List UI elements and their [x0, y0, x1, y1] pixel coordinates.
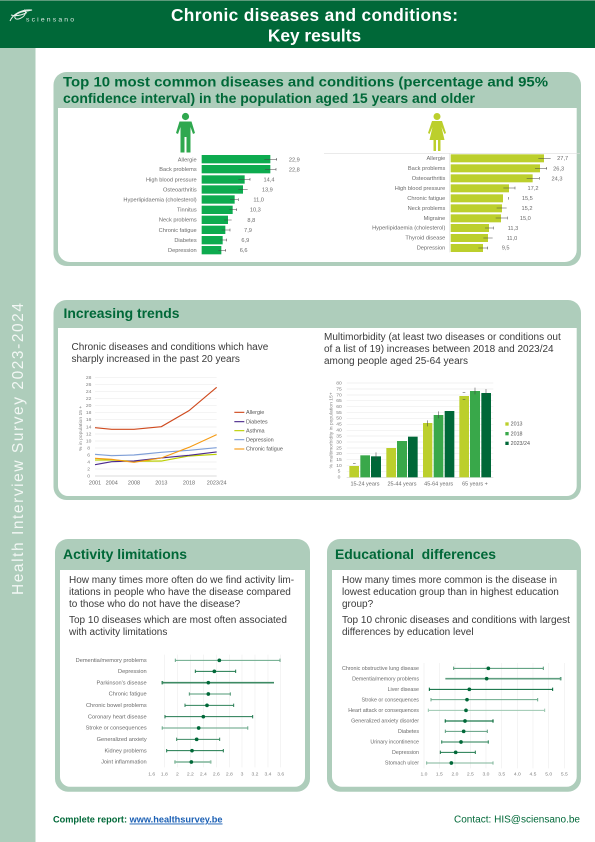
panel heading: Activity limitations — [63, 546, 187, 562]
line chart: 16 — [86, 417, 92, 423]
panel heading — [63, 74, 548, 106]
bar chart: women: Thyroid disease — [405, 236, 445, 242]
legend: 2023/24 — [511, 441, 530, 447]
text: question: How many times more often do we find activity lim- — [69, 575, 294, 586]
line chart: 2008 — [128, 481, 140, 487]
bar chart: multimorbidity: 30 — [336, 439, 342, 445]
bar chart: women: Neck problems — [408, 206, 445, 212]
legend — [505, 422, 530, 447]
line chart: 2013 — [155, 481, 167, 487]
line chart: 8 — [87, 445, 90, 451]
line chart: 12 — [86, 431, 92, 437]
forest plot: educational differences: Chronic obstructive lung disease — [342, 666, 419, 672]
line chart: % in population 15 + — [78, 406, 84, 451]
forest plot: educational differences: Liver disease — [388, 687, 419, 693]
text: multimorbidity caption — [324, 332, 561, 367]
bar chart: women: 15,0 — [520, 216, 531, 222]
forest plot: educational differences: 3.0 — [483, 771, 490, 777]
line chart: 2001 — [89, 481, 101, 487]
forest plot: educational differences: Stroke or consequences — [362, 697, 419, 703]
bar chart: women: High blood pressure — [395, 186, 445, 192]
text: line chart caption — [72, 342, 269, 365]
bar chart: men: Allergie — [178, 157, 197, 163]
forest plot: educational differences: 4.0 — [514, 771, 521, 777]
forest plot: educational differences: Depression — [392, 750, 419, 756]
bar chart: multimorbidity: 45-64 years — [424, 482, 453, 488]
icon: woman — [428, 113, 446, 151]
forest plot: educational differences: 5.5 — [561, 771, 568, 777]
text: question — [68, 575, 294, 638]
bar chart: women: 11,3 — [508, 226, 518, 232]
bar chart: men: 22,8 — [289, 167, 300, 173]
header band — [0, 0, 595, 48]
forest plot: activity limitations: 2.2 — [187, 771, 194, 777]
text: question: itations in people who have the disease compared — [69, 587, 291, 598]
footer: contact: Contact: HIS@sciensano.be — [454, 814, 580, 826]
forest plot: educational differences: 2.5 — [467, 771, 474, 777]
bar chart: multimorbidity: 65 years + — [462, 482, 488, 488]
bar chart: women: 9,5 — [502, 246, 510, 252]
bar chart: men: 8,8 — [247, 218, 255, 224]
bar chart: multimorbidity: 75 — [336, 386, 342, 392]
bar chart: women: 15,2 — [521, 206, 533, 212]
panel: increasing trends — [54, 300, 581, 500]
line chart: 4 — [87, 459, 90, 465]
bar chart: men: Neck problems — [159, 218, 197, 224]
bar chart: men: 13,9 — [262, 188, 273, 194]
line chart: 10 — [86, 438, 92, 444]
bar chart: women: 27,7 — [557, 156, 568, 162]
bar chart: multimorbidity: 10 — [336, 463, 342, 469]
bar chart: women: 11,0 — [507, 236, 517, 242]
text: multimorbidity caption: among people aged 25-64 years — [324, 356, 468, 367]
bar chart: men: 11,0 — [253, 198, 264, 204]
forest plot: educational differences: 4.5 — [530, 771, 537, 777]
bar chart: women: Depression — [417, 246, 445, 252]
legend: Allergie — [246, 410, 264, 416]
sidebar title: Health Interview Survey 2023-2024 — [10, 303, 27, 595]
panel: top 10 diseases — [54, 72, 581, 266]
panel heading: confidence interval) in the population aged 15 years and older — [63, 91, 476, 106]
forest plot: activity limitations: Generalized anxiety — [97, 737, 147, 743]
line chart: 24 — [86, 389, 92, 395]
bar chart: men: 7,9 — [244, 228, 252, 234]
legend — [234, 410, 283, 453]
sidebar — [0, 48, 36, 842]
forest plot: activity limitations: Chronic fatigue — [109, 692, 147, 698]
panel heading: Top 10 most common diseases and conditions (percentage and 95% — [63, 74, 548, 90]
bar chart: multimorbidity: 35 — [336, 433, 342, 439]
text: line chart caption: sharply increased in the past 20 years — [72, 354, 240, 365]
title — [171, 5, 458, 46]
bar chart: multimorbidity: 20 — [336, 451, 342, 457]
bar chart: men: 10,3 — [250, 208, 261, 214]
title: Key results — [268, 26, 361, 46]
forest plot: educational differences: 1.0 — [421, 771, 428, 777]
bar chart: men: Tinnitus — [177, 208, 197, 214]
legend: Depression — [246, 437, 274, 443]
text: multimorbidity caption: Multimorbidity (at least two diseases or conditions out — [324, 332, 561, 343]
forest plot: activity limitations: Depression — [118, 669, 147, 675]
bar chart: men: Hyperlipidaemia (cholesterol) — [123, 198, 197, 204]
logo: sciensano — [26, 16, 74, 24]
line chart: 2 — [87, 466, 90, 472]
forest plot: activity limitations: 2.4 — [200, 771, 207, 777]
line chart: 28 — [86, 375, 92, 381]
forest plot: educational differences: Diabetes — [398, 729, 419, 735]
forest plot: educational differences: Generalized anxiety disorder — [351, 719, 419, 725]
forest plot: activity limitations: 2 — [176, 771, 179, 777]
legend: Diabetes — [246, 419, 268, 425]
bar chart: men: 22,9 — [289, 157, 300, 163]
logo — [10, 10, 74, 24]
line chart: 0 — [87, 473, 90, 479]
line chart: 18 — [86, 410, 92, 416]
line chart: 2023/24 — [207, 481, 227, 487]
panel: activity limitations — [55, 539, 310, 792]
forest plot: activity limitations — [76, 655, 284, 777]
bar chart: women — [324, 153, 580, 252]
line chart: 2018 — [183, 481, 195, 487]
forest plot: educational differences: 3.5 — [498, 771, 505, 777]
text: question: to those who do not have the disease? — [69, 599, 241, 610]
text: multimorbidity caption: of a list of 19) increases between 2018 and 2023/24 — [324, 344, 554, 355]
line chart: 14 — [86, 424, 92, 430]
bar chart: women: Back problems — [408, 166, 445, 172]
forest plot: educational differences: 1.5 — [436, 771, 443, 777]
bar chart: multimorbidity: 15-24 years — [351, 482, 380, 488]
bar chart: men — [123, 155, 300, 254]
bar chart: women: 17,2 — [527, 186, 539, 192]
bar chart: multimorbidity — [328, 380, 530, 488]
forest plot: educational differences: Stomach ulcer — [385, 761, 419, 767]
bar chart: multimorbidity: 60 — [336, 404, 342, 410]
forest plot: activity limitations: Joint inflammation — [101, 760, 147, 766]
bar chart: multimorbidity: 55 — [336, 410, 342, 416]
forest plot: educational differences: Dementia/memory problems — [352, 676, 419, 682]
forest plot: activity limitations: 2.6 — [213, 771, 220, 777]
bar chart: men: Depression — [168, 248, 197, 254]
forest plot: activity limitations: Parkinson's disease — [97, 680, 147, 686]
bar chart: multimorbidity: 40 — [336, 428, 342, 434]
line chart: 6 — [87, 452, 90, 458]
text: question: How many times more common is the disease in — [342, 575, 557, 586]
bar chart: men: 6,9 — [241, 238, 249, 244]
bar chart: women: Allergie — [426, 156, 445, 162]
line chart: 26 — [86, 382, 92, 388]
forest plot: activity limitations: 3.2 — [252, 771, 259, 777]
bar chart: multimorbidity: 80 — [336, 380, 342, 386]
line chart: 20 — [86, 403, 92, 409]
bar chart: multimorbidity: 0 — [338, 475, 341, 481]
text: question: lowest education group than in highest education — [342, 587, 559, 598]
icon: man — [176, 113, 195, 152]
line chart: 2004 — [106, 481, 118, 487]
bar chart: women: Migraine — [424, 216, 445, 222]
legend: Asthma — [246, 428, 266, 434]
forest plot: activity limitations: Chronic bowel problems — [86, 703, 147, 709]
text: question: Top 10 chronic diseases and conditions with largest — [342, 615, 570, 626]
title: Chronic diseases and conditions: — [171, 5, 458, 25]
bar chart: multimorbidity: 65 — [336, 398, 342, 404]
forest plot: activity limitations: 1.8 — [161, 771, 168, 777]
panel heading: Educational differences — [335, 546, 496, 562]
forest plot: activity limitations: Stroke or consequences — [86, 726, 147, 732]
bar chart: multimorbidity: % multimorbidity in population 15+ — [328, 392, 334, 468]
forest plot: activity limitations: 2.8 — [226, 771, 233, 777]
forest plot: activity limitations: 3.4 — [265, 771, 272, 777]
line chart — [78, 375, 283, 487]
forest plot: activity limitations: 3 — [241, 771, 244, 777]
line chart: 22 — [86, 396, 92, 402]
forest plot: educational differences: 2.0 — [452, 771, 459, 777]
forest plot: activity limitations: Coronary heart disease — [88, 714, 147, 720]
panel: educational differences — [327, 539, 581, 792]
text: question — [342, 575, 570, 638]
bar chart: multimorbidity: 15 — [336, 457, 342, 463]
bar chart: women: Osteoarthritis — [412, 176, 445, 182]
text: question: group? — [342, 599, 374, 610]
bar chart: multimorbidity: 50 — [336, 416, 342, 422]
bar chart: men: Osteoarthritis — [163, 187, 197, 193]
forest plot: educational differences: Urinary incontinence — [370, 740, 419, 746]
bar chart: women: 15,5 — [522, 196, 533, 202]
bar chart: women: 26,3 — [553, 166, 564, 172]
legend: 2018 — [511, 431, 523, 437]
bar chart: women: Hyperlipidaemia (cholesterol) — [372, 226, 445, 232]
footer: complete report: Complete report: www.healthsurvey.be — [53, 814, 223, 824]
bar chart: men: Diabetes — [174, 238, 197, 244]
forest plot: activity limitations: Dementia/memory problems — [76, 658, 147, 664]
bar chart: men: Chronic fatigue — [159, 228, 197, 234]
text: question: differences by education level — [342, 627, 474, 638]
bar chart: multimorbidity: 70 — [336, 392, 342, 398]
bar chart: men: 14,4 — [263, 177, 275, 183]
panel heading: Increasing trends — [64, 305, 180, 321]
text: line chart caption: Chronic diseases and conditions which have — [72, 342, 269, 353]
forest plot: activity limitations: 3.6 — [277, 771, 284, 777]
bar chart: women: Chronic fatigue — [407, 196, 445, 202]
bar chart: women: 24,3 — [551, 176, 563, 182]
text: question: with activity limitations — [68, 627, 167, 638]
forest plot: educational differences: 5.0 — [545, 771, 552, 777]
bar chart: men: 6,6 — [240, 248, 248, 254]
forest plot: educational differences: Heart attack or consequences — [348, 708, 419, 714]
bar chart: multimorbidity: 5 — [338, 469, 341, 475]
bar chart: men: Back problems — [159, 167, 197, 173]
text: question: Top 10 diseases which are most often associated — [69, 615, 287, 626]
bar chart: men: High blood pressure — [146, 177, 197, 183]
bar chart: multimorbidity: 25-44 years — [388, 482, 417, 488]
forest plot: activity limitations: Kidney problems — [105, 748, 147, 754]
bar chart: multimorbidity: 25 — [336, 445, 342, 451]
legend: 2013 — [511, 422, 523, 428]
bar chart: multimorbidity: 45 — [336, 422, 342, 428]
legend: Chronic fatigue — [246, 447, 283, 453]
forest plot: activity limitations: 1.6 — [148, 771, 155, 777]
forest plot: educational differences — [342, 663, 568, 777]
